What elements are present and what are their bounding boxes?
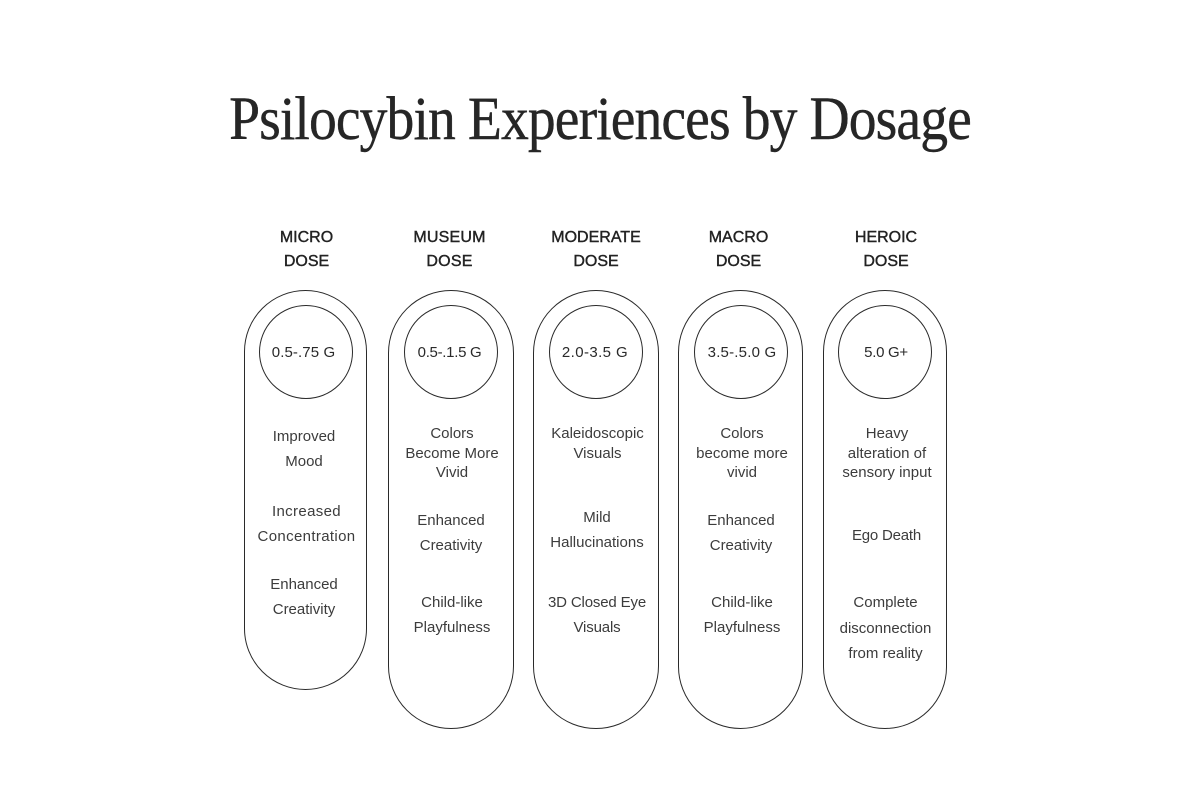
- effect: enhanced creativity: Creativity: [273, 601, 335, 618]
- effect: kaleidoscopic visuals: Kaleidoscopic: [551, 425, 644, 442]
- heading: macro dose: DOSE: [716, 253, 761, 270]
- dose amount: heroic dose: 5.0 G+: [864, 344, 908, 361]
- effect: complete disconnection from reality: Complete: [853, 594, 918, 611]
- effect: increased concentration: Concentration: [258, 528, 355, 545]
- effect: increased concentration: Increased: [272, 503, 341, 520]
- effect: colors more vivid: [405, 425, 499, 481]
- dose amount: macro dose: 3.5-.5.0 G: [708, 344, 776, 361]
- effect: child-like playfulness: Playfulness: [704, 619, 780, 636]
- dose amount: micro dose: 0.5-.75 G: [272, 344, 335, 361]
- effect: enhanced creativity: Enhanced: [270, 576, 338, 593]
- effect: improved mood: Improved: [273, 428, 335, 445]
- effect: 3d closed eye visuals: 3D Closed Eye: [548, 594, 646, 611]
- heading: moderate dose: DOSE: [573, 253, 619, 270]
- dose circle: macro dose: [694, 305, 788, 399]
- effect: heavy alteration of sensory input: Heavy: [866, 425, 908, 442]
- heading: heroic dose: [855, 229, 917, 270]
- pill: macro dose: [678, 290, 803, 729]
- heading: micro dose: DOSE: [284, 253, 329, 270]
- heading: museum dose: MUSEUM: [413, 229, 486, 246]
- effect: improved mood: Mood: [285, 453, 323, 470]
- dose circle: moderate dose: [549, 305, 643, 399]
- heading: micro dose: MICRO: [280, 229, 333, 246]
- effect: increased concentration: [258, 503, 355, 545]
- effect: enhanced creativity: Enhanced: [707, 512, 775, 529]
- effect: complete disconnection from reality: from reality: [848, 645, 923, 662]
- heading: macro dose: MACRO: [709, 229, 768, 246]
- effect: complete disconnection from reality: [840, 594, 931, 662]
- effect: child-like playfulness: Playfulness: [414, 619, 490, 636]
- effect: kaleidoscopic visuals: [551, 425, 644, 462]
- effect: child-like playfulness: [414, 594, 490, 636]
- effect: enhanced creativity: Creativity: [420, 537, 482, 554]
- title: Psilocybin Experiences by Dosage: [229, 86, 971, 153]
- effect: heavy alteration of sensory input: [842, 425, 932, 481]
- effect: colors more vivid: Vivid: [436, 464, 468, 481]
- pill: micro dose: [244, 290, 367, 690]
- effect: child-like playfulness: [704, 594, 780, 636]
- effect: enhanced creativity: Enhanced: [417, 512, 485, 529]
- effect: mild hallucinations: [550, 509, 644, 551]
- heading: macro dose: [709, 229, 768, 270]
- heading: museum dose: DOSE: [426, 253, 473, 270]
- effect: improved mood: [273, 428, 335, 470]
- effect: 3d closed eye visuals: [548, 594, 646, 636]
- effect: colors more vivid: [696, 425, 788, 481]
- effect: heavy alteration of sensory input: alteration of: [848, 444, 926, 462]
- effect: mild hallucinations: Hallucinations: [550, 534, 644, 551]
- effect: kaleidoscopic visuals: Visuals: [573, 444, 622, 462]
- heading: heroic dose: DOSE: [863, 253, 909, 270]
- dose circle: museum dose: [404, 305, 498, 399]
- pill: heroic dose: [823, 290, 947, 729]
- heading: museum dose: [413, 229, 486, 270]
- dose circle: heroic dose: [838, 305, 932, 399]
- heading: moderate dose: MODERATE: [551, 229, 641, 246]
- effect: enhanced creativity: [707, 512, 775, 554]
- effect: 3d closed eye visuals: Visuals: [573, 619, 621, 636]
- effect: complete disconnection from reality: disconnection: [840, 620, 931, 636]
- effect: colors more vivid: Colors: [720, 425, 764, 442]
- effect: enhanced creativity: [270, 576, 338, 618]
- effect: enhanced creativity: [417, 512, 485, 554]
- effect: child-like playfulness: Child-like: [711, 594, 773, 611]
- effect: colors more vivid: Become More: [405, 444, 499, 462]
- dose amount: museum dose: 0.5-.1.5 G: [418, 344, 481, 361]
- effect: mild hallucinations: Mild: [583, 509, 611, 526]
- effect: heavy alteration of sensory input: sensory input: [842, 464, 932, 481]
- effect: enhanced creativity: Creativity: [710, 537, 772, 554]
- effect: child-like playfulness: Child-like: [421, 594, 483, 611]
- dose circle: micro dose: [259, 305, 353, 399]
- heading: heroic dose: HEROIC: [855, 229, 917, 246]
- heading: moderate dose: [551, 229, 641, 270]
- pill: moderate dose: [533, 290, 659, 729]
- effect: colors more vivid: Colors: [430, 425, 474, 442]
- effect: colors more vivid: vivid: [727, 464, 757, 481]
- heading: micro dose: [280, 229, 333, 270]
- pill: museum dose: [388, 290, 514, 729]
- dose amount: moderate dose: 2.0-3.5 G: [562, 344, 628, 361]
- effect: ego death: Ego Death: [852, 527, 921, 544]
- effect: colors more vivid: become more: [696, 444, 788, 462]
